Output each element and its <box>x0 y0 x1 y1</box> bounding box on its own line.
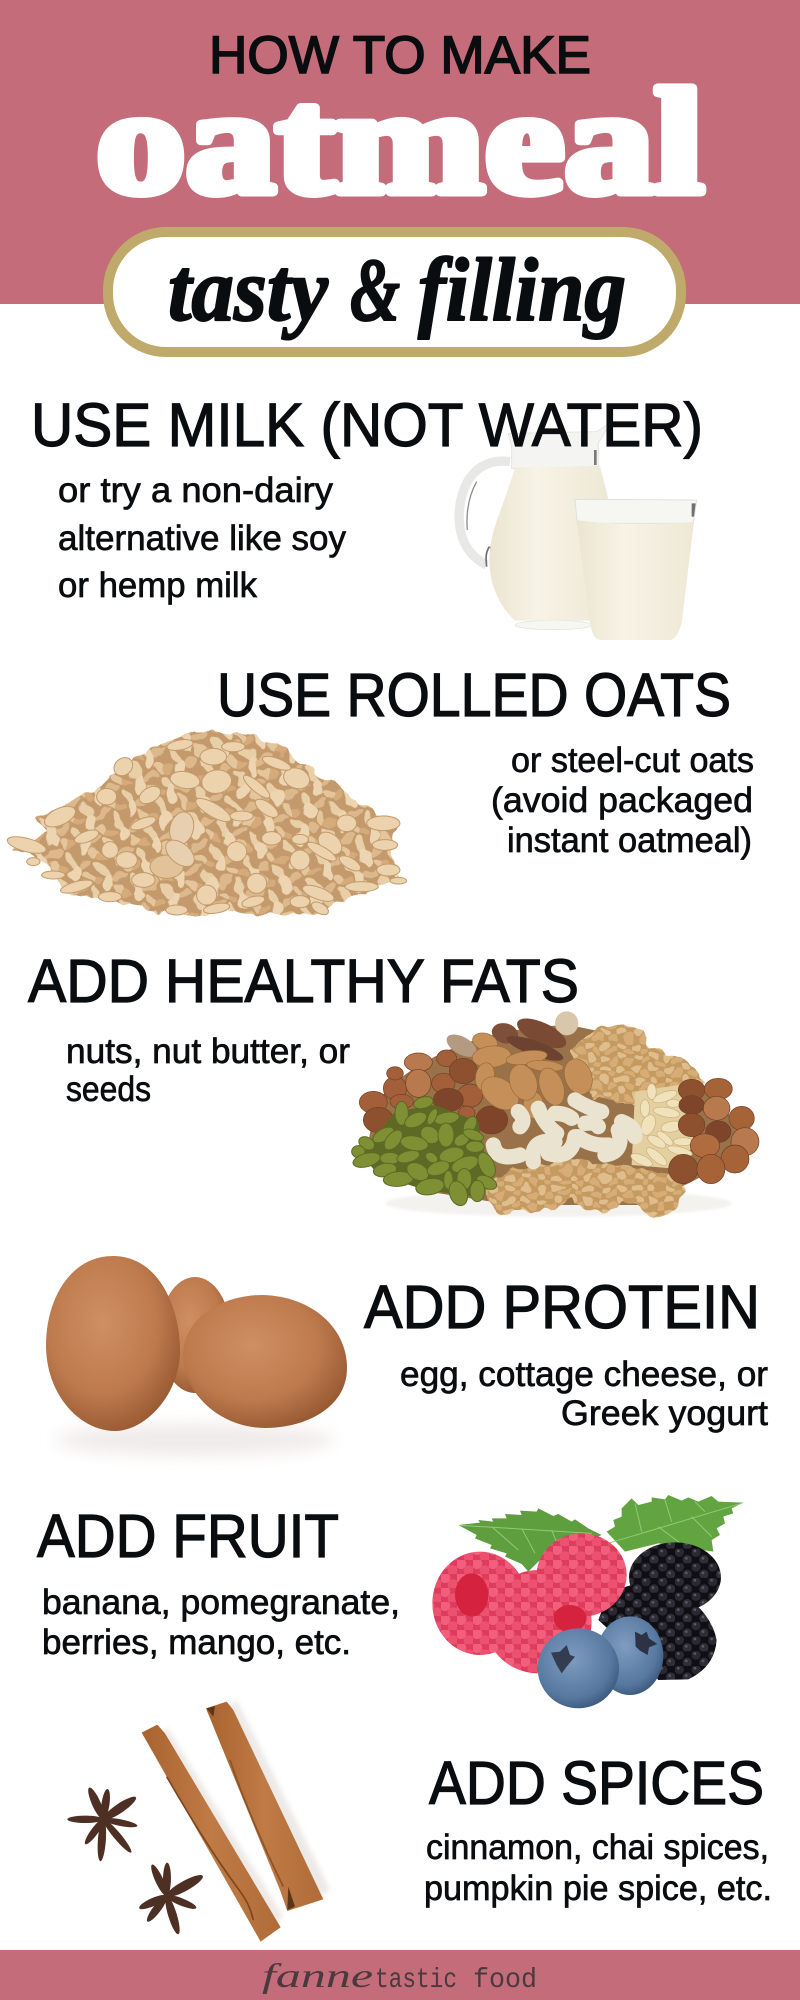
blackberry top <box>629 1542 721 1612</box>
leaf right <box>607 1495 743 1552</box>
text block: pumpkin pie spice, etc. <box>424 1869 772 1908</box>
blueberry right <box>597 1616 663 1695</box>
text block: banana, pomegranate, <box>42 1583 400 1622</box>
text block: berries, mango, etc. <box>42 1623 351 1662</box>
heading: ADD FRUIT <box>37 1502 339 1570</box>
text block: instant oatmeal) <box>507 821 752 860</box>
text block <box>400 1355 768 1433</box>
star anise top <box>67 1786 139 1861</box>
glass milk <box>577 520 694 640</box>
text block: nuts, nut butter, or <box>66 1032 350 1071</box>
raspberry left <box>432 1552 528 1655</box>
pill text: & <box>350 241 400 340</box>
walnuts <box>485 1025 702 1217</box>
heading: ADD HEALTHY FATS <box>28 947 579 1015</box>
leaf left <box>458 1508 602 1572</box>
stick shadow <box>160 1700 330 1930</box>
cashews <box>493 1100 635 1162</box>
hazelnuts left <box>359 1050 508 1134</box>
text block: or hemp milk <box>58 566 257 605</box>
text block: seeds <box>66 1070 151 1109</box>
section: protein <box>364 1273 768 1433</box>
footer band <box>0 1950 800 2000</box>
pill badge <box>108 232 681 352</box>
text block: Greek yogurt <box>561 1394 768 1433</box>
egg shadow <box>55 1424 335 1456</box>
footer logo <box>262 1958 537 1996</box>
footer logo: food <box>473 1965 537 1996</box>
section: fruit <box>37 1502 400 1662</box>
raspberry back <box>537 1533 627 1617</box>
hazelnuts right <box>669 1078 759 1184</box>
heading: how to make: HOW TO MAKE <box>209 26 591 85</box>
footer logo: tastic <box>375 1965 457 1996</box>
heading: ADD PROTEIN <box>364 1273 760 1341</box>
blackberry bottom <box>598 1581 717 1680</box>
pistachios <box>351 1095 499 1208</box>
icon: berries <box>432 1495 743 1708</box>
text block: or try a non-dairy <box>58 471 334 510</box>
nut base <box>365 1025 745 1205</box>
section: use milk <box>31 391 703 605</box>
pill text: tasty <box>168 241 329 340</box>
text block <box>42 1583 400 1662</box>
flakes <box>6 738 407 917</box>
icon: cinnamon and star anise <box>67 1700 330 1942</box>
nut shadow <box>385 1190 732 1217</box>
heading: USE MILK (NOT WATER) <box>31 391 703 459</box>
section: rolled oats <box>217 661 754 860</box>
pile body <box>13 731 400 915</box>
pine nuts <box>632 1085 695 1168</box>
jug handle <box>459 461 510 565</box>
almonds <box>471 1030 597 1118</box>
pill text: filling <box>418 241 626 340</box>
text block: alternative like soy <box>58 519 346 558</box>
jug milk <box>489 466 608 621</box>
heading: ADD SPICES <box>429 1749 764 1817</box>
footer logo: fanne <box>262 1958 373 1995</box>
text block <box>66 1032 350 1109</box>
heading: USE ROLLED OATS <box>217 661 731 729</box>
jug base <box>515 620 592 630</box>
blueberry left <box>538 1628 619 1708</box>
brazil nuts <box>443 1011 578 1065</box>
section: spices <box>424 1749 772 1908</box>
header band <box>0 0 800 304</box>
icon: eggs <box>46 1256 347 1456</box>
cinnamon stick long <box>142 1725 281 1942</box>
text block <box>424 1828 772 1908</box>
jug neck <box>508 423 610 468</box>
text block: cinnamon, chai spices, <box>426 1828 769 1867</box>
glass rim <box>575 499 697 523</box>
star anise bottom <box>138 1863 205 1935</box>
cinnamon stick short <box>206 1702 323 1911</box>
icon: nut mix <box>351 1011 759 1217</box>
text block: (avoid packaged <box>491 781 753 820</box>
icon: milk jug and glass <box>459 423 697 640</box>
back egg <box>159 1277 231 1393</box>
text block <box>491 741 754 860</box>
section: healthy fats <box>28 947 579 1109</box>
text block: or steel-cut oats <box>511 741 754 780</box>
heading: oatmeal: oatmeal <box>96 59 704 225</box>
pill text <box>168 241 626 340</box>
right egg <box>183 1295 347 1428</box>
left egg <box>46 1256 180 1431</box>
text block <box>58 471 346 605</box>
raspberry front <box>485 1570 592 1673</box>
icon: oat pile <box>6 731 407 917</box>
pill outline <box>108 232 681 352</box>
text block: egg, cottage cheese, or <box>400 1355 768 1394</box>
